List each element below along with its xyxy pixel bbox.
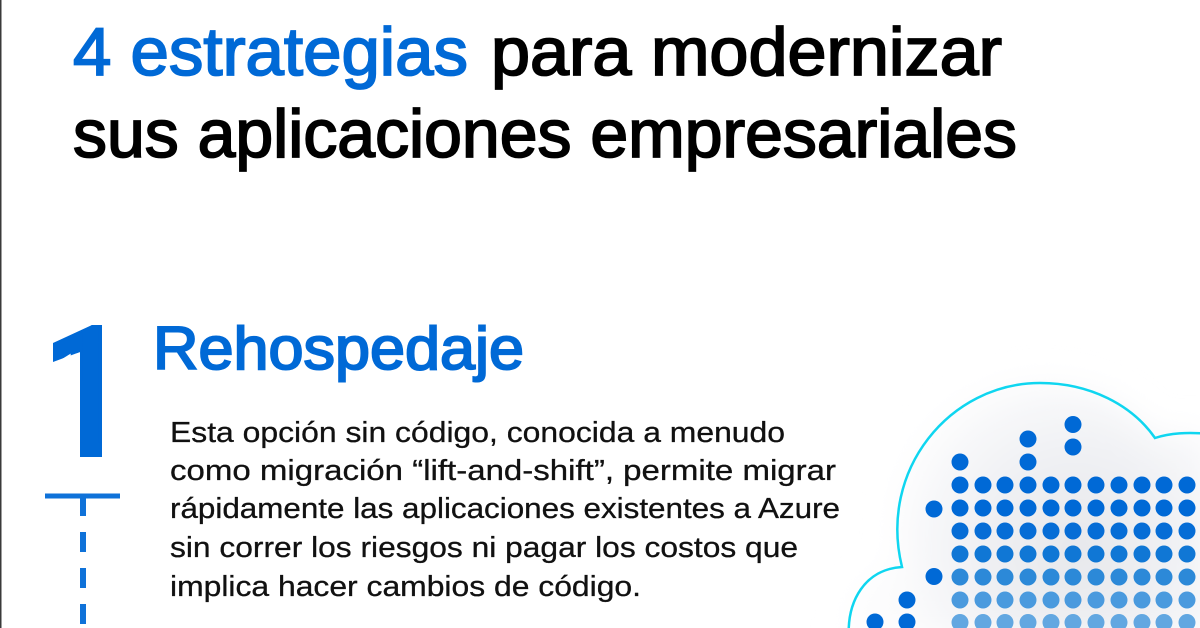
- cloud illustration: [848, 383, 1200, 628]
- body text: Esta opción sin código, conocida a menudo: [170, 417, 785, 449]
- body text: rápidamente las aplicaciones existentes a Azure: [170, 493, 840, 525]
- body text: sin correr los riesgos ni pagar los costos que: [170, 532, 798, 564]
- title: para modernizar: [491, 14, 1002, 90]
- timeline connector: [45, 494, 120, 624]
- title: 4 estrategias: [73, 14, 468, 90]
- body text: [170, 417, 840, 603]
- body text: implica hacer cambios de código.: [170, 571, 641, 603]
- title: sus aplicaciones empresariales: [73, 96, 1017, 172]
- large numeral 1: 1: [30, 277, 141, 500]
- heading: Rehospedaje: Rehospedaje: [153, 315, 524, 382]
- body text: como migración “lift-and-shift”, permite migrar: [170, 455, 836, 487]
- title: [73, 14, 1017, 172]
- dot matrix: [866, 416, 1196, 628]
